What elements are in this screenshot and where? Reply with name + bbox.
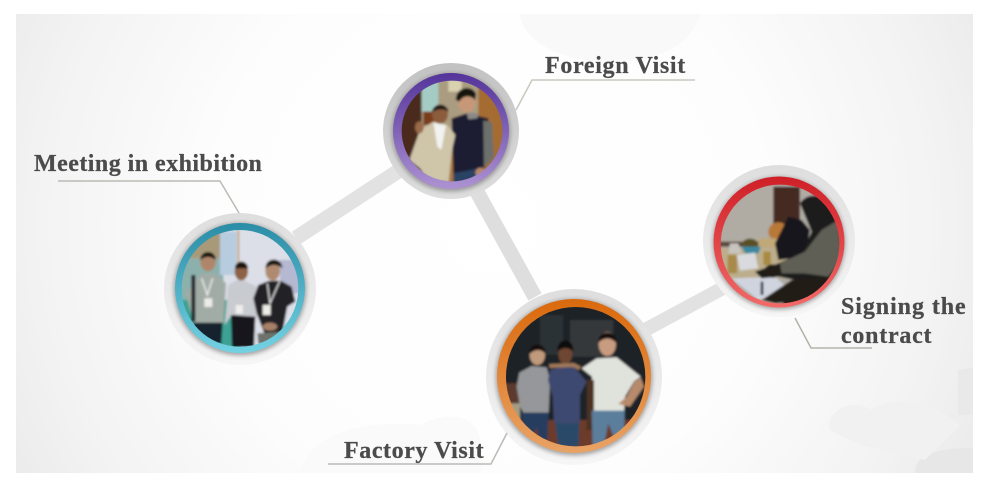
callout: Signing the contract xyxy=(795,294,967,349)
callout: Factory Visit xyxy=(328,433,507,464)
callout: Foreign Visit xyxy=(516,53,695,110)
callout: Meeting in exhibition xyxy=(34,151,262,213)
callout: Signing the contract: contract xyxy=(841,323,932,349)
node: Factory Visit photo xyxy=(486,289,662,465)
node: Foreign Visit photo xyxy=(383,63,519,199)
callout: Factory Visit: Factory Visit xyxy=(344,438,484,464)
node: Meeting in exhibition photo xyxy=(164,213,316,365)
connector: foreign visit to factory xyxy=(476,190,535,297)
callout: Foreign Visit: Foreign Visit xyxy=(545,53,686,79)
callout: Signing the contract: Signing the xyxy=(841,294,967,320)
node: Signing the contract photo xyxy=(703,165,855,317)
connector: exhibition to foreign visit xyxy=(296,170,400,238)
callout: Meeting in exhibition: Meeting in exhibition xyxy=(34,151,262,177)
connector: factory to contract xyxy=(645,288,723,330)
